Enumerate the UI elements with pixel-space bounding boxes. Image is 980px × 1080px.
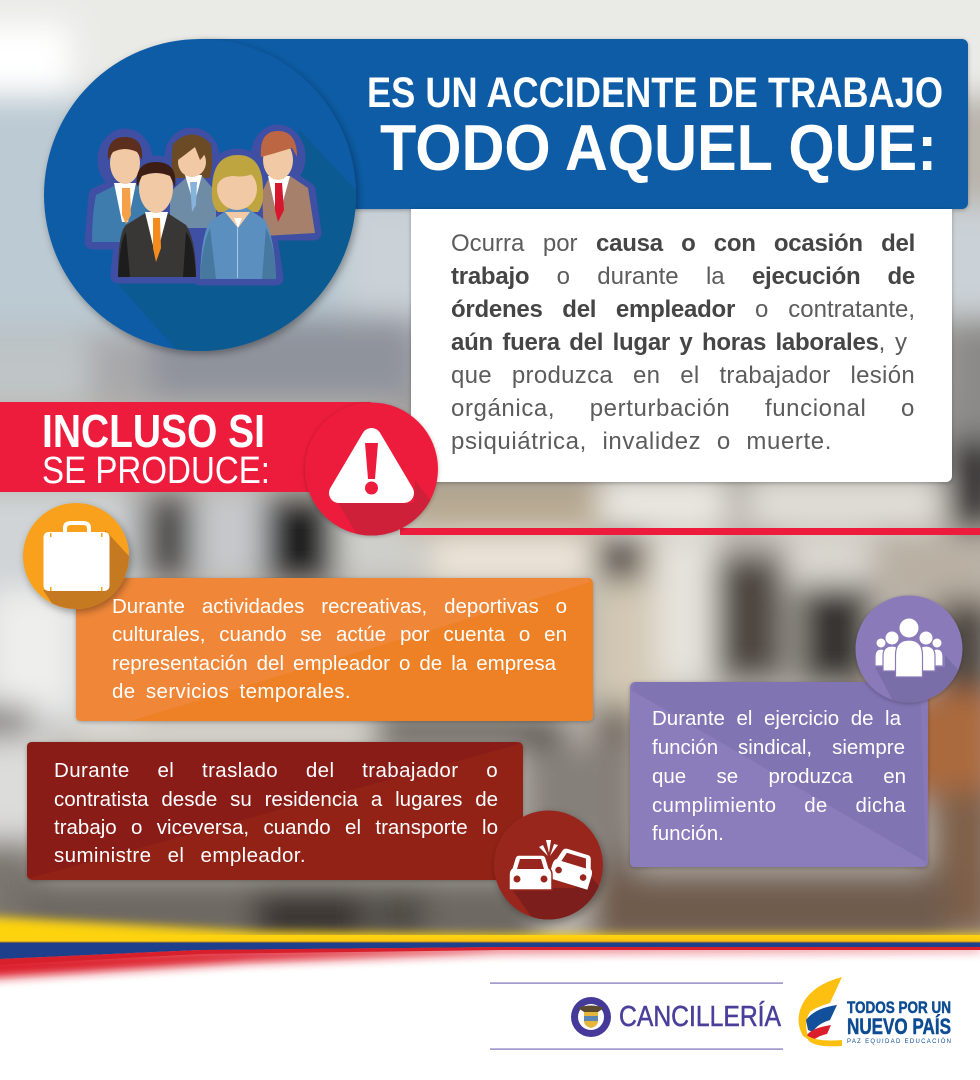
- text block: orange card: de servicios temporales.: [112, 680, 351, 703]
- text block: purple card: función.: [652, 822, 724, 845]
- text block: purple card: cumplimiento de dicha: [652, 794, 906, 817]
- banner title: TODO AQUEL QUE:: [380, 111, 937, 184]
- text block: purple card: que se produzca en: [652, 765, 906, 788]
- text block: main description: [451, 230, 915, 455]
- panel: dark red card: [27, 742, 523, 880]
- front woman: [200, 155, 276, 279]
- logo: Todos por un nuevo país: PAZ EQUIDAD EDUCACIÓN: [847, 1038, 951, 1045]
- icon: group of people: [854, 594, 963, 706]
- icon: suitcase: [23, 503, 140, 625]
- banner title: [367, 69, 943, 184]
- panel: purple card: [630, 682, 928, 867]
- logo: Todos por un nuevo país: NUEVO PAÍS: [847, 1014, 951, 1039]
- text block: dark red card: suministre el empleador.: [54, 844, 306, 867]
- band heading text: [42, 405, 270, 492]
- footer divider lines: [490, 982, 783, 1050]
- header banner: [200, 39, 968, 209]
- impact sparks: [539, 840, 558, 856]
- text block: main description: psiquiátrica, invalidez o muerte.: [451, 428, 832, 455]
- back middle woman: [170, 134, 216, 228]
- text block: orange card: culturales, cuando se actúe por cuenta o en: [112, 623, 567, 646]
- icon: car crash: [492, 810, 608, 926]
- band heading text: SE PRODUCE:: [42, 450, 270, 492]
- text block: main description: que produzca en el trabajador lesión: [451, 362, 915, 389]
- text block: dark red card: Durante el traslado del trabajador o: [54, 759, 498, 782]
- people group icon: [92, 131, 315, 279]
- text block: dark red card: trabajo o viceversa, cuando el transporte lo: [54, 816, 498, 839]
- red heading band: [0, 402, 980, 535]
- back left man: [92, 137, 150, 242]
- left car: [509, 855, 552, 890]
- panel: orange card: [76, 578, 593, 721]
- band heading text: INCLUSO SI: [42, 405, 265, 457]
- text block: main description: orgánica, perturbación funcional o: [451, 395, 915, 422]
- logo: Cancillería: [571, 997, 782, 1037]
- text block: purple card: Durante el ejercicio de la: [652, 707, 901, 730]
- text block: orange card: Durante actividades recreativas, deportivas o: [112, 595, 567, 618]
- text block: dark red card: [54, 759, 498, 867]
- text block: main description: Ocurra por causa o con ocasión del: [451, 230, 915, 257]
- seal: [571, 997, 611, 1037]
- back right man: [261, 131, 315, 236]
- logo: Todos por un nuevo país: [799, 977, 951, 1046]
- text block: main description: órdenes del empleador o contratante,: [451, 296, 915, 323]
- text block: main description: trabajo o durante la ejecución de: [451, 263, 915, 290]
- long shadow: [110, 130, 360, 360]
- text block: purple card: función sindical, siempre: [652, 736, 905, 759]
- front man: [118, 162, 196, 277]
- right car: [548, 846, 597, 890]
- white description card: [411, 209, 952, 482]
- text block: purple card: [652, 707, 906, 845]
- text block: orange card: [112, 595, 567, 703]
- purple outline: [92, 132, 314, 278]
- text block: dark red card: contratista desde su residencia a lugares de: [54, 788, 498, 811]
- people circle badge: [44, 39, 360, 360]
- red rule line: [400, 528, 980, 535]
- flag stripes band: [0, 916, 980, 1080]
- text block: orange card: representación del empleador o de la empresa: [112, 652, 556, 675]
- logo: Todos por un nuevo país: TODOS POR UN: [847, 999, 951, 1017]
- text block: main description: aún fuera del lugar y horas laborales, y: [451, 329, 907, 356]
- logo: Cancillería: CANCILLERÍA: [619, 1000, 782, 1033]
- icon: warning: [305, 402, 445, 545]
